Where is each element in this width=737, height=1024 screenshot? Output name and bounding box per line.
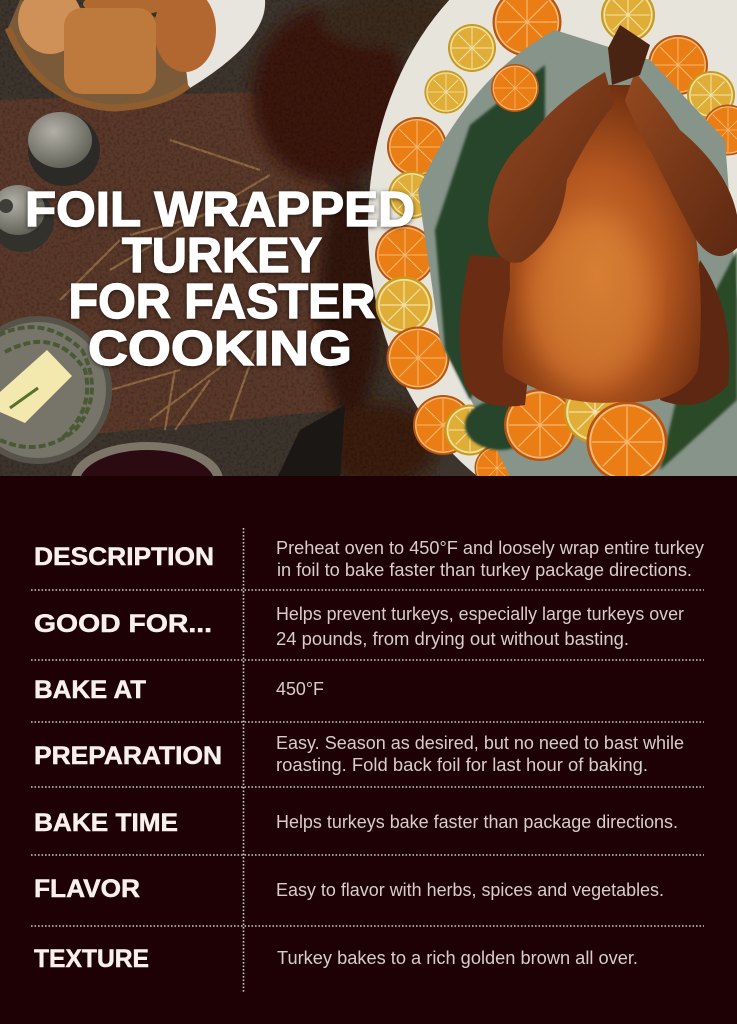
row: bake at — [34, 676, 324, 704]
row: bake time: Helps turkeys bake faster than package directions. — [276, 812, 678, 832]
row: description — [34, 538, 704, 580]
row: description: in foil to bake faster than turkey package directions. — [277, 560, 692, 580]
row: bake time — [34, 809, 678, 837]
basket of bread rolls — [8, 0, 265, 108]
table dividers — [31, 528, 704, 992]
row: preparation — [34, 733, 684, 775]
brown foliage — [246, 0, 449, 476]
row: texture: Turkey bakes to a rich golden brown all over. — [277, 948, 638, 968]
foreground slices — [491, 64, 539, 112]
row: texture — [34, 945, 638, 973]
title — [25, 183, 415, 376]
row: flavor — [34, 875, 664, 903]
row: good for — [34, 604, 684, 649]
roast turkey — [460, 25, 737, 406]
row: description: Preheat oven to 450°F and loosely wrap entire turkey — [276, 538, 704, 558]
gravy bowl — [72, 442, 222, 476]
row: description: DESCRIPTION — [34, 543, 214, 571]
hero photo: Thanksgiving table with turkey — [0, 0, 737, 520]
table wood — [0, 0, 476, 476]
title: FOIL WRAPPED — [25, 183, 415, 237]
salt shaker — [28, 112, 100, 186]
row: bake at: 450°F — [276, 679, 324, 699]
row: flavor: FLAVOR — [34, 875, 140, 903]
inner dish — [418, 30, 737, 476]
orange and lemon slices — [375, 0, 737, 491]
title: FOR FASTER — [68, 275, 376, 329]
burlap runner — [0, 92, 340, 443]
row: preparation: roasting. Fold back foil for last hour of baking. — [276, 755, 648, 775]
row: preparation: Easy. Season as desired, but no need to bast while — [276, 733, 684, 753]
spoon — [278, 405, 345, 476]
dry grass — [60, 140, 280, 430]
row: good for: Helps prevent turkeys, especially large turkeys over — [276, 604, 684, 624]
row: bake at: BAKE AT — [34, 676, 146, 704]
butter dish with rosemary — [0, 316, 112, 464]
row: good for: 24 pounds, from drying out without basting. — [276, 629, 629, 649]
table and burlap grain — [0, 0, 440, 476]
row: bake time: BAKE TIME — [34, 809, 178, 837]
row: flavor: Easy to flavor with herbs, spices and vegetables. — [276, 880, 664, 900]
serving platter — [368, 0, 737, 520]
pepper shaker — [0, 185, 54, 252]
title: COOKING — [88, 322, 352, 376]
green dill — [435, 65, 737, 470]
row: preparation: PREPARATION — [34, 742, 222, 770]
row: texture: TEXTURE — [34, 945, 149, 973]
title: TURKEY — [122, 229, 322, 283]
row: good for: GOOD FOR... — [34, 610, 212, 638]
